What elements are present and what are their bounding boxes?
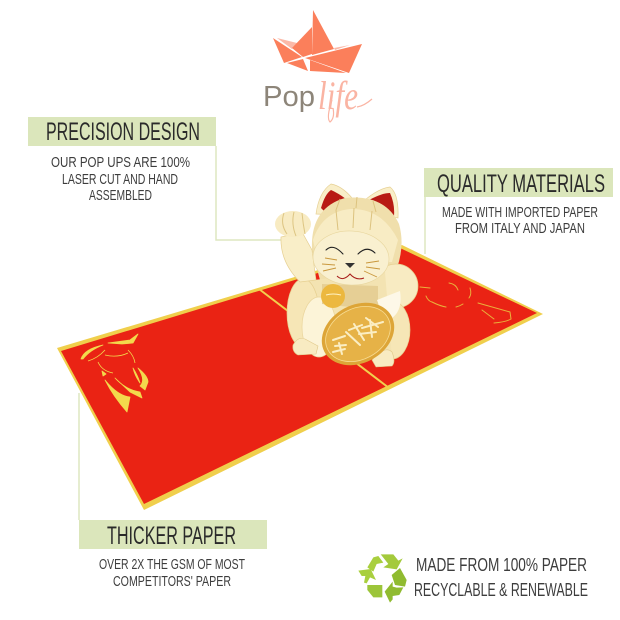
icon: recycling arrows bbox=[358, 554, 407, 603]
lucky cat pop-up bbox=[275, 184, 418, 377]
logo word Pop: Pop bbox=[263, 81, 315, 113]
logo word life: life bbox=[318, 73, 358, 118]
callout: precision design bbox=[28, 117, 216, 204]
body text: LASER CUT AND HAND bbox=[62, 172, 178, 188]
raised arm bbox=[281, 232, 316, 282]
connector: thicker paper bbox=[78, 393, 80, 520]
heading bar bbox=[424, 168, 613, 197]
right lower body bbox=[374, 301, 410, 359]
chest slice bbox=[322, 284, 378, 310]
heading bar bbox=[28, 117, 216, 146]
right lobe bbox=[374, 264, 418, 308]
heading text: THICKER PAPER bbox=[107, 522, 236, 550]
coin character bbox=[333, 318, 383, 354]
logo: Poplife bbox=[263, 10, 372, 122]
face bbox=[312, 229, 390, 287]
body core bbox=[296, 272, 392, 358]
body text bbox=[99, 557, 245, 590]
head slice lines bbox=[336, 197, 376, 230]
body text: OVER 2X THE GSM OF MOST bbox=[99, 557, 245, 573]
feet bbox=[293, 338, 394, 367]
body text: ASSEMBLED bbox=[89, 188, 152, 204]
left ear bbox=[316, 184, 352, 215]
head front slices bbox=[313, 209, 398, 262]
left front lobe bbox=[302, 297, 336, 357]
card red surface bbox=[61, 248, 537, 504]
left cut-out figure bbox=[81, 334, 148, 412]
body text bbox=[442, 205, 598, 237]
gold coin bbox=[311, 291, 405, 377]
body text: FROM ITALY AND JAPAN bbox=[455, 221, 585, 237]
icon: origami boat bbox=[273, 10, 362, 73]
callout: quality materials bbox=[424, 168, 613, 237]
pop-up card bbox=[57, 245, 543, 510]
heading text: PRECISION DESIGN bbox=[46, 118, 200, 146]
body text: COMPETITORS' PAPER bbox=[113, 574, 231, 590]
raised paw bbox=[275, 211, 311, 237]
bell bbox=[321, 284, 345, 308]
callout: thicker paper bbox=[79, 520, 267, 590]
side flap bbox=[377, 291, 401, 318]
right cut-out figure bbox=[420, 283, 511, 323]
body text bbox=[51, 155, 190, 204]
card fold line bbox=[259, 289, 389, 388]
right ear bbox=[366, 187, 398, 218]
connector: quality materials bbox=[424, 197, 426, 254]
body text: OUR POP UPS ARE 100% bbox=[51, 155, 190, 171]
card base bbox=[57, 245, 543, 510]
connector: precision design bbox=[216, 146, 292, 240]
left rear lobe bbox=[287, 279, 319, 347]
heading bar bbox=[79, 520, 267, 549]
recycling statement bbox=[414, 555, 588, 600]
head back bbox=[312, 198, 402, 280]
logo swash bbox=[328, 99, 372, 122]
